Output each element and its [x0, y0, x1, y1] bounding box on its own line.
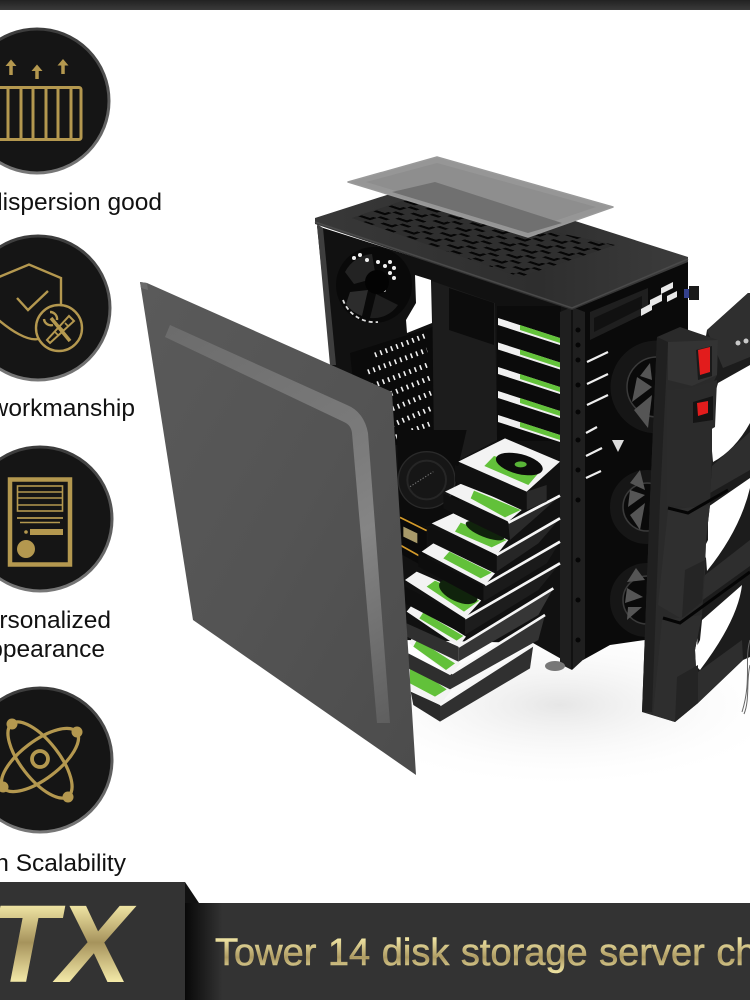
motherboard tray: [432, 281, 497, 470]
drive 3: [428, 513, 560, 572]
drive 5: [405, 563, 560, 635]
drive bay rails: [497, 306, 561, 442]
left product block: [0, 882, 185, 1000]
top face: [315, 178, 688, 310]
feature: appearance: [0, 447, 112, 663]
feature: scalability: [0, 688, 127, 877]
feature: heat dispersion: [0, 29, 162, 216]
panel embossed frame: [165, 325, 390, 723]
main band: [185, 903, 750, 1000]
top vent grille: [358, 200, 615, 276]
left frame edge: [317, 224, 336, 365]
feature: workmanship: [0, 236, 135, 422]
side panel: [140, 282, 416, 775]
wires: [742, 640, 750, 714]
psu: [397, 430, 467, 568]
corner columns: [560, 307, 585, 670]
arm buttons: [736, 338, 748, 346]
drive 1: [455, 438, 560, 510]
label: personalized appearance: [0, 607, 111, 663]
perforated rear slots: [350, 327, 436, 445]
floor shadow: [320, 620, 750, 790]
bezel main column: [642, 327, 718, 722]
right face: [572, 257, 699, 660]
icon: shield and tools: [0, 236, 110, 380]
white bay slits: [586, 352, 608, 478]
rear opening: [406, 275, 432, 333]
dust filter: [348, 157, 613, 237]
icon: atom: [0, 688, 112, 832]
fold: [185, 882, 199, 903]
red switch small: [693, 396, 713, 423]
fan frame openings: [695, 365, 750, 670]
top edge: [315, 222, 688, 308]
bezel fan frame: [695, 293, 750, 703]
icon: heat dispersion: [0, 29, 109, 173]
chassis foot: [545, 661, 565, 671]
drive 4: [418, 542, 560, 602]
drive 7: [408, 615, 545, 689]
front bezel: [642, 293, 750, 722]
front logo mark: [612, 440, 624, 452]
drive 2: [443, 483, 560, 540]
front fans: [617, 349, 695, 630]
left side interior: [317, 226, 572, 665]
red switch large: [696, 346, 712, 380]
drive 6: [407, 588, 553, 662]
bottom title band: [0, 882, 750, 1000]
module gaps: [663, 490, 750, 623]
bezel modules: [653, 340, 718, 722]
rear fan: [336, 247, 412, 323]
top bar: [0, 0, 750, 10]
hard drives stack: [405, 438, 560, 722]
icon: document: [0, 447, 112, 591]
drive 8: [410, 645, 533, 722]
tower chassis: [315, 157, 699, 671]
